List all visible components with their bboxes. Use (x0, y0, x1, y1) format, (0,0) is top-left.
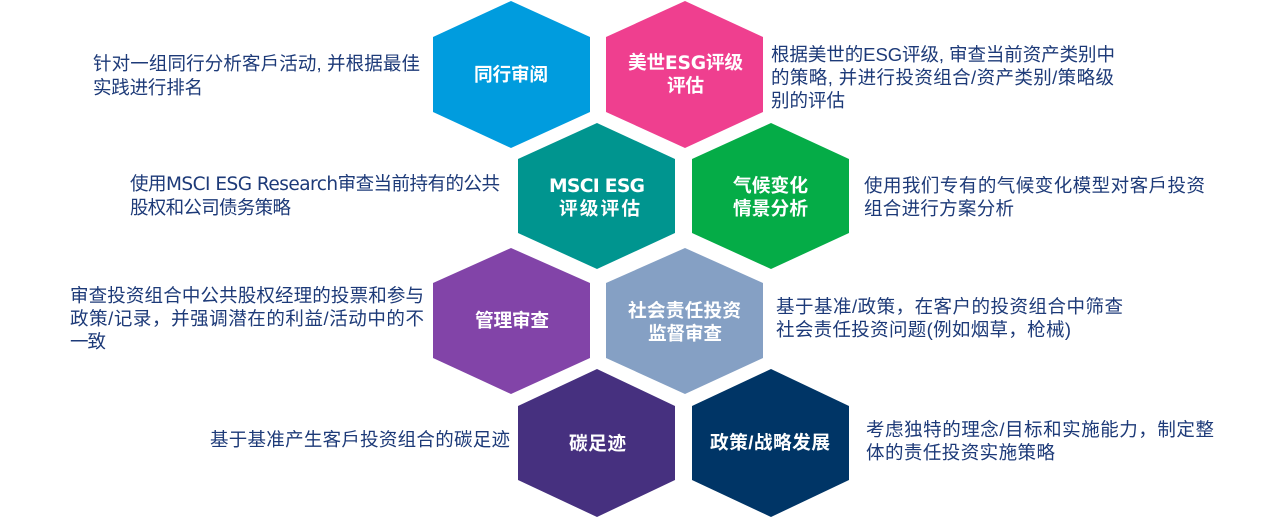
hexagon: SRI monitoring review (606, 248, 763, 394)
description: policy and strategy development (866, 419, 1214, 463)
description: stewardship review: 审查投资组合中公共股权经理的投票和参与 (70, 285, 424, 306)
description: ESG rating assessment: 别的评估 (771, 90, 845, 111)
description: MSCI ESG: 使用MSCI ESG Research审查当前持有的公共 (130, 174, 500, 195)
description: carbon footprint: 基于基准产生客戶投资组合的碳足迹 (210, 429, 510, 450)
description: peer review: 实践进行排名 (93, 77, 203, 98)
hexagon: MSCI ESG rating assessment: MSCI ESG (549, 176, 645, 197)
hexagon: stewardship review (433, 248, 590, 394)
hexagon: carbon footprint: 碳足迹 (569, 433, 626, 454)
description: SRI monitoring review (776, 296, 1123, 340)
hexagon: peer review: 同行审阅 (474, 64, 548, 85)
hexagon: SRI monitoring review: 社会责任投资 (628, 300, 741, 321)
hexagon: climate scenario analysis: 情景分析 (733, 198, 808, 219)
hexagon: climate scenario analysis: 气候变化 (733, 175, 808, 196)
hexagon: ISS ESG rating assessment: 评估 (667, 75, 704, 96)
description: SRI monitoring review: 基于基准/政策，在客户的投资组合中筛查 (776, 296, 1123, 317)
hexagon: MSCI ESG rating assessment (518, 123, 675, 269)
hexagon: carbon footprint (518, 369, 675, 517)
description: policy and strategy development: 考虑独特的理念/目标和实施能力，制定整 (866, 419, 1214, 440)
hexagon: SRI monitoring review: 监督审查 (648, 323, 722, 344)
hexagon: peer review (433, 1, 590, 148)
description: stewardship review: 政策/记录，并强调潜在的利益/活动中的不 (70, 308, 424, 329)
description: MSCI ESG (130, 174, 500, 218)
description: MSCI ESG: 股权和公司债务策略 (130, 197, 291, 218)
description: policy and strategy development: 体的责任投资实施策略 (866, 442, 1055, 463)
description: peer review: 针对一组同行分析客戶活动, 并根据最佳 (93, 53, 420, 74)
hexagon: climate scenario analysis (692, 123, 849, 269)
hexagon: policy and strategy development (692, 369, 849, 517)
description: climate scenario analysis (864, 175, 1205, 219)
description: climate scenario analysis: 使用我们专有的气候变化模型对客戶投资 (864, 175, 1205, 196)
hexagon: ISS ESG rating assessment (606, 1, 763, 148)
description: SRI monitoring review: 社会责任投资问题(例如烟草，枪械) (776, 319, 1071, 340)
hexagon: stewardship review: 管理审查 (475, 310, 549, 331)
description: stewardship review: 一致 (70, 331, 106, 352)
description: ESG rating assessment (771, 44, 1115, 111)
description: ESG rating assessment: 的策略, 并进行投资组合/资产类别/策略级 (771, 67, 1114, 88)
hexagon: ISS ESG rating assessment: 美世ESG评级 (628, 52, 743, 74)
hexagon: policy and strategy development: 政策/战略发展 (710, 432, 830, 453)
description: stewardship review (70, 285, 424, 352)
description: peer review (93, 53, 420, 98)
description: climate scenario analysis: 组合进行方案分析 (864, 198, 1014, 219)
description: ESG rating assessment: 根据美世的ESG评级, 审查当前资产类别中 (771, 44, 1115, 65)
hexagon: MSCI ESG rating assessment: 评级评估 (559, 198, 640, 219)
